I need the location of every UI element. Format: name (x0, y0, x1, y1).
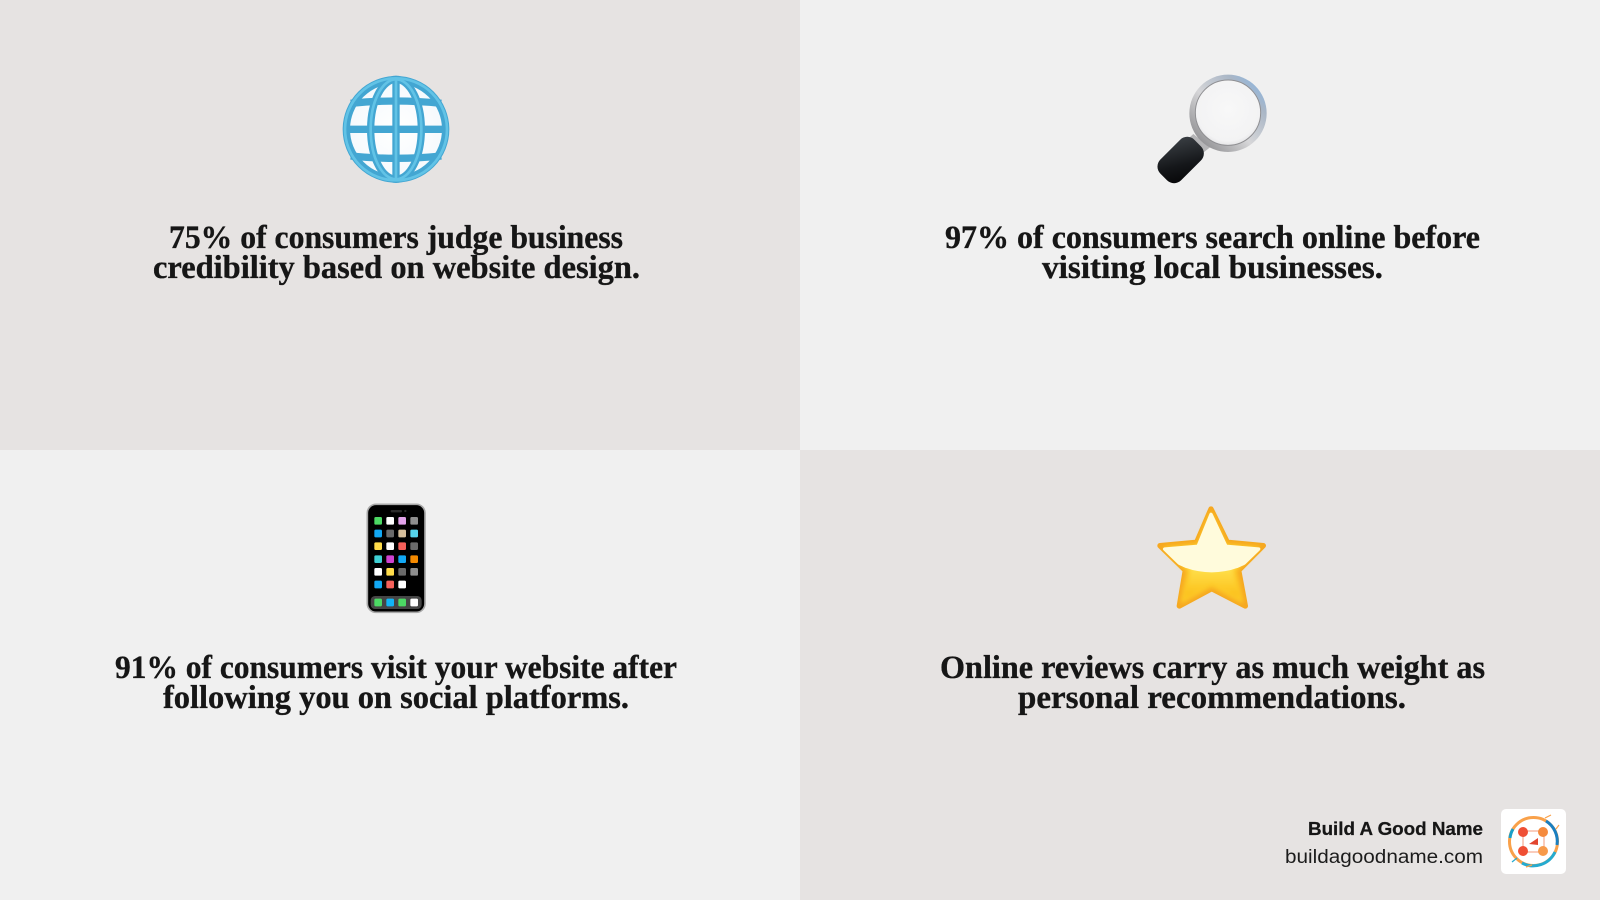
heading: 91% social: following you on social platforms. (163, 680, 629, 716)
icon: smartphone (367, 504, 425, 612)
panel: website credibility (0, 0, 800, 450)
heading: 91% social: 91% of consumers visit your website after (115, 650, 677, 686)
icon: star (1160, 509, 1263, 606)
heading: online reviews: personal recommendations. (1018, 680, 1406, 716)
heading: online reviews: Online reviews carry as much weight as (940, 650, 1485, 686)
panel: online reviews (800, 450, 1600, 900)
heading: 97% search: visiting local businesses. (1042, 250, 1383, 286)
brand footer (1285, 809, 1566, 874)
panel: social platforms (0, 450, 800, 900)
icon: magnifying glass (1153, 75, 1267, 187)
icon: brand logo (1501, 809, 1566, 874)
brand url: buildagoodname.com (1285, 847, 1483, 868)
heading: online reviews (940, 650, 1485, 716)
panel: local search (800, 0, 1600, 450)
brand name: Build A Good Name (1308, 819, 1483, 839)
icon: globe (345, 78, 447, 180)
heading: 91% social (115, 650, 677, 716)
heading: 97% search (945, 220, 1480, 286)
heading: 75% credibility: credibility based on website design. (153, 250, 640, 286)
heading: 75% credibility: 75% of consumers judge business (169, 220, 623, 256)
heading: 97% search: 97% of consumers search online before (945, 220, 1480, 256)
heading: 75% credibility (153, 220, 640, 286)
